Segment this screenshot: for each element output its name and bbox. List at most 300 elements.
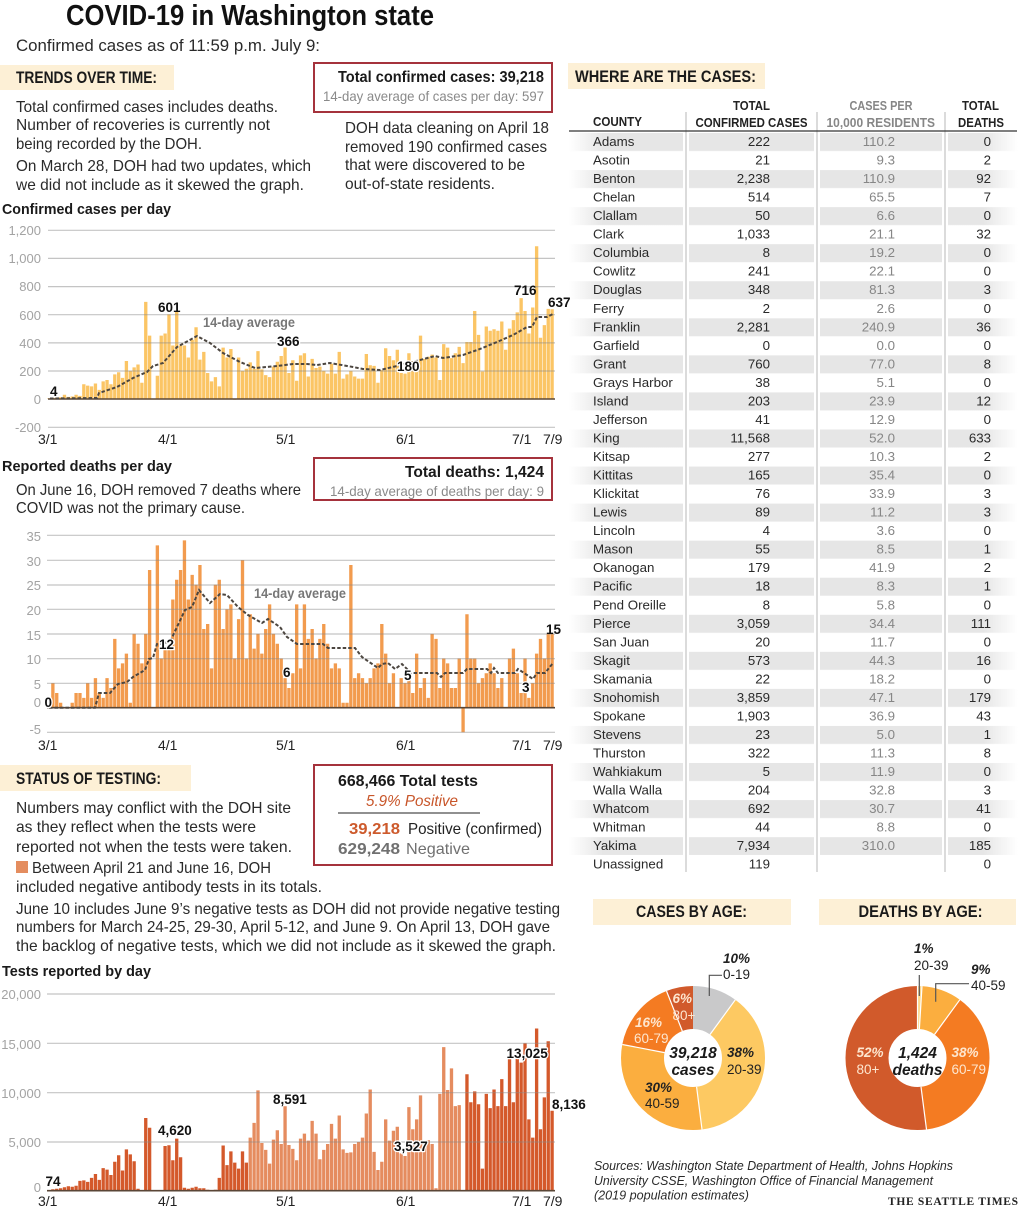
table header: DEATHS bbox=[958, 115, 1004, 130]
column: county names: Pend Oreille bbox=[593, 597, 666, 612]
column: county names: Kittitas bbox=[593, 468, 633, 482]
heading: deaths by age bbox=[819, 899, 1016, 925]
grid lines and axis labels: 800 bbox=[19, 279, 41, 294]
column: county names: Spokane bbox=[593, 708, 646, 723]
column: cases per 10,000 residents: 47.1 bbox=[869, 690, 895, 705]
value labels: 637 bbox=[548, 295, 571, 310]
column: cases per 10,000 residents: 12.9 bbox=[869, 412, 895, 427]
column: total confirmed cases: 20 bbox=[755, 634, 770, 649]
column: total deaths: 0 bbox=[984, 375, 991, 390]
column: cases per 10,000 residents: 11.2 bbox=[870, 505, 895, 520]
column: total deaths: 111 bbox=[971, 616, 991, 631]
column: county names: Stevens bbox=[593, 727, 641, 742]
column: total confirmed cases: 8 bbox=[763, 245, 770, 260]
column: cases per 10,000 residents: 35.4 bbox=[869, 468, 895, 482]
value labels: 14-day average bbox=[254, 586, 346, 601]
heading: cases by age bbox=[593, 899, 791, 925]
legend: antibody test swatch: included negative antibody tests in its totals. bbox=[16, 879, 322, 896]
column: county names: Skamania bbox=[593, 671, 653, 686]
grid lines and axis labels: 20 bbox=[27, 603, 41, 618]
column: county names: Lincoln bbox=[593, 523, 635, 538]
column: total confirmed cases: 2,238 bbox=[737, 171, 770, 186]
value labels: 180 bbox=[397, 359, 420, 374]
text block: DOH data cleaning note: out-of-state residents. bbox=[345, 176, 495, 193]
slice labels: 60-79 bbox=[952, 1062, 986, 1077]
panel: where are the cases bbox=[568, 63, 1020, 872]
slice labels: 52% bbox=[856, 1045, 884, 1060]
column: county names: Garfield bbox=[593, 338, 640, 353]
column: county names: Cowlitz bbox=[593, 264, 636, 279]
column: total confirmed cases: 514 bbox=[748, 190, 770, 205]
column: total confirmed cases: 277 bbox=[748, 449, 770, 464]
column: county names: Asotin bbox=[593, 152, 630, 168]
column: total deaths: 1 bbox=[984, 727, 991, 742]
grid lines and axis labels: 1,000 bbox=[8, 251, 41, 266]
column: total confirmed cases: 222 bbox=[748, 134, 770, 149]
column: total confirmed cases: 1,903 bbox=[737, 708, 770, 723]
value labels: 4,620 bbox=[158, 1123, 192, 1138]
text block: June 10 note: numbers for March 24-25, 29-30, April 5-12, and June 9. On April 13, DOH gave bbox=[16, 919, 550, 936]
table header: CASES PER bbox=[850, 98, 913, 113]
text block: DOH data cleaning note: removed 190 confirmed cases bbox=[345, 139, 547, 156]
column: cases per 10,000 residents: 8.5 bbox=[876, 542, 895, 557]
text block: trends notes: Number of recoveries is currently not bbox=[16, 117, 271, 134]
grid lines and axis labels: 5/1 bbox=[276, 1193, 296, 1209]
column: total confirmed cases: 41 bbox=[755, 412, 770, 427]
grid lines and axis labels: 7/1 bbox=[512, 431, 532, 447]
column: cases per 10,000 residents: 8.3 bbox=[876, 579, 895, 594]
grid lines and axis labels: 25 bbox=[27, 578, 41, 593]
column: total deaths: 0 bbox=[984, 134, 991, 149]
column: cases per 10,000 residents: 11.3 bbox=[870, 746, 895, 760]
grid lines and axis labels: 5/1 bbox=[276, 737, 296, 753]
column: county names: Clallam bbox=[593, 208, 637, 223]
panel: cases by age bbox=[593, 899, 791, 1129]
text block: testing notes bbox=[16, 800, 292, 856]
grid lines and axis labels: 4/1 bbox=[158, 737, 178, 753]
slice labels: 0-19 bbox=[723, 967, 750, 982]
value labels: 5 bbox=[404, 668, 412, 683]
grid lines and axis labels: 15 bbox=[27, 628, 41, 643]
column: total confirmed cases: 11,568 bbox=[730, 430, 770, 446]
text block: trends notes: we did not include as it skewed the graph. bbox=[15, 177, 304, 194]
column: cases per 10,000 residents: 18.2 bbox=[869, 671, 895, 686]
callout: total confirmed cases: Total confirmed cases: 39,218 bbox=[338, 69, 544, 86]
column: county names: Island bbox=[593, 393, 628, 408]
callout: test totals: 5.9% Positive bbox=[366, 793, 458, 810]
legend: antibody test swatch bbox=[16, 860, 322, 896]
column: cases per 10,000 residents: 23.9 bbox=[869, 393, 895, 408]
column: total confirmed cases: 2 bbox=[763, 301, 770, 316]
grid lines and axis labels: 30 bbox=[27, 554, 41, 569]
grid lines and axis labels: 7/9 bbox=[543, 431, 563, 447]
text block: trends notes: Total confirmed cases includes deaths. bbox=[16, 99, 278, 116]
text block: DOH data cleaning note: DOH data cleaning on April 18 bbox=[345, 120, 549, 137]
column: total confirmed cases: 760 bbox=[748, 356, 770, 371]
column: cases per 10,000 residents: 9.3 bbox=[876, 152, 895, 168]
column: county names: Lewis bbox=[593, 505, 627, 520]
grid lines and axis labels: 1,200 bbox=[8, 223, 41, 238]
callout: total deaths: 14-day average of deaths per day: 9 bbox=[330, 483, 544, 499]
column: total deaths: 41 bbox=[976, 801, 991, 816]
text block: trends notes: On March 28, DOH had two updates, which bbox=[16, 158, 311, 175]
column: cases per 10,000 residents: 41.9 bbox=[869, 560, 895, 575]
column: cases per 10,000 residents: 5.0 bbox=[876, 727, 895, 742]
center total: deaths bbox=[893, 1062, 943, 1079]
title: COVID-19 in Washington state bbox=[66, 0, 434, 32]
column: total confirmed cases: 5 bbox=[763, 764, 770, 779]
column: total confirmed cases bbox=[730, 134, 770, 872]
column: county names: Mason bbox=[593, 542, 633, 557]
column: county names: Adams bbox=[593, 134, 635, 149]
grid lines and axis labels: 20,000 bbox=[1, 987, 41, 1002]
column: total confirmed cases: 21 bbox=[755, 152, 770, 168]
center total bbox=[893, 1045, 943, 1079]
grid lines and axis labels: 4/1 bbox=[158, 431, 178, 447]
slice labels: 38% bbox=[727, 1045, 754, 1060]
column: total deaths: 0 bbox=[984, 468, 991, 482]
grid lines and axis labels bbox=[8, 223, 563, 447]
table header bbox=[593, 98, 1004, 130]
bars: tests, positive and negative bbox=[49, 1029, 552, 1191]
column: total deaths: 3 bbox=[984, 783, 991, 798]
column: county names: Whatcom bbox=[593, 801, 649, 816]
slice labels: 20-39 bbox=[914, 958, 949, 973]
column: total deaths: 3 bbox=[984, 282, 991, 297]
value labels bbox=[50, 283, 571, 399]
column: cases per 10,000 residents: 5.1 bbox=[876, 375, 895, 390]
value labels: 8,591 bbox=[273, 1092, 307, 1107]
column: total deaths: 12 bbox=[976, 393, 991, 408]
grid lines and axis labels: 7/1 bbox=[512, 1193, 532, 1209]
text block: trends notes bbox=[15, 99, 311, 194]
slice labels: 80+ bbox=[672, 1008, 696, 1023]
slice labels bbox=[856, 941, 1006, 1077]
credit: The Seattle Times: THE SEATTLE TIMES bbox=[888, 1196, 1018, 1208]
column: cases per 10,000 residents: 3.6 bbox=[876, 523, 895, 538]
value labels: 8,136 bbox=[552, 1097, 586, 1112]
column: total confirmed cases: 18 bbox=[755, 579, 770, 594]
column: county names bbox=[593, 134, 673, 872]
column: cases per 10,000 residents bbox=[862, 134, 895, 853]
center total bbox=[669, 1045, 717, 1079]
column: total confirmed cases: 203 bbox=[748, 393, 770, 408]
column: total deaths: 0 bbox=[984, 857, 991, 872]
slice labels bbox=[634, 951, 762, 1111]
table header: TOTAL bbox=[962, 98, 999, 113]
column: total deaths: 3 bbox=[984, 505, 991, 520]
column: cases per 10,000 residents: 32.8 bbox=[869, 783, 895, 798]
column: cases per 10,000 residents: 36.9 bbox=[869, 708, 895, 723]
column: cases per 10,000 residents: 30.7 bbox=[869, 801, 895, 816]
value labels bbox=[46, 1046, 586, 1189]
text block: sources bbox=[594, 1158, 953, 1202]
grid lines and axis labels: 6/1 bbox=[396, 431, 416, 447]
value labels: 15 bbox=[546, 622, 562, 637]
slice labels: 10% bbox=[723, 951, 750, 966]
column: cases per 10,000 residents: 8.8 bbox=[876, 820, 895, 835]
column: total confirmed cases: 204 bbox=[748, 783, 770, 798]
callout: test totals: Positive (confirmed) bbox=[408, 821, 542, 838]
column: county names: Pierce bbox=[593, 616, 631, 631]
heading: status of testing: STATUS OF TESTING: bbox=[16, 769, 161, 788]
column: cases per 10,000 residents: 2.6 bbox=[876, 301, 895, 316]
column: county names: Okanogan bbox=[593, 560, 654, 575]
callout: total deaths: Total deaths: 1,424 bbox=[405, 464, 544, 481]
subtitle: Confirmed cases as of 11:59 p.m. July 9: bbox=[16, 36, 320, 55]
grid lines and axis labels: 5 bbox=[34, 677, 41, 692]
slice labels: 60-79 bbox=[634, 1031, 669, 1046]
callout: test totals: 629,248 bbox=[338, 841, 400, 858]
column: total confirmed cases: 3,059 bbox=[737, 616, 770, 631]
column: cases per 10,000 residents: 34.4 bbox=[869, 616, 895, 631]
callout: test totals: Negative bbox=[406, 841, 470, 858]
column: cases per 10,000 residents: 81.3 bbox=[869, 282, 895, 297]
column: cases per 10,000 residents: 110.9 bbox=[863, 171, 895, 186]
grid lines and axis labels: 4/1 bbox=[158, 1193, 178, 1209]
table header: COUNTY bbox=[593, 114, 642, 129]
column: total deaths: 0 bbox=[984, 412, 991, 427]
column: cases per 10,000 residents: 110.2 bbox=[863, 134, 895, 149]
column: total deaths bbox=[969, 134, 991, 872]
column: cases per 10,000 residents: 52.0 bbox=[869, 430, 895, 446]
value labels: 366 bbox=[277, 334, 300, 349]
grid lines and axis labels: 7/9 bbox=[543, 1193, 563, 1209]
column: total deaths: 8 bbox=[984, 746, 991, 760]
column: county names: Chelan bbox=[593, 190, 635, 205]
column: county names: Grant bbox=[593, 356, 627, 371]
column: county names: Snohomish bbox=[593, 690, 660, 705]
grid lines and axis labels: -200 bbox=[15, 420, 41, 435]
column: total confirmed cases: 4 bbox=[763, 523, 770, 538]
column: cases per 10,000 residents: 21.1 bbox=[869, 227, 895, 242]
column: total deaths: 0 bbox=[984, 820, 991, 835]
grid lines and axis labels: 400 bbox=[19, 336, 41, 351]
callout: test totals: 39,218 bbox=[349, 821, 400, 838]
column: cases per 10,000 residents: 310.0 bbox=[862, 838, 895, 853]
column: cases per 10,000 residents: 11.7 bbox=[870, 634, 895, 649]
column: county names: Jefferson bbox=[593, 412, 647, 427]
value labels: 6 bbox=[283, 665, 291, 680]
grid lines and axis labels bbox=[1, 987, 563, 1209]
legend: antibody test swatch: Between April 21 and June 16, DOH bbox=[32, 860, 271, 877]
column: county names: Klickitat bbox=[593, 486, 639, 501]
column: cases per 10,000 residents: 44.3 bbox=[869, 653, 895, 668]
column: total deaths: 2 bbox=[984, 152, 991, 168]
column: total confirmed cases: 38 bbox=[755, 375, 770, 390]
column: total deaths: 8 bbox=[984, 356, 991, 371]
column: total confirmed cases: 573 bbox=[748, 653, 770, 668]
center total: cases bbox=[671, 1062, 715, 1079]
callout: total confirmed cases bbox=[314, 63, 552, 112]
column: total confirmed cases: 322 bbox=[748, 746, 770, 760]
column: total deaths: 0 bbox=[984, 764, 991, 779]
donut chart: cases by age bbox=[622, 951, 762, 1129]
donut chart: deaths by age bbox=[856, 941, 1006, 1129]
column: total confirmed cases: 1,033 bbox=[737, 227, 770, 242]
text block: sources: Sources: Washington State Department of Health, Johns Hopkins bbox=[594, 1158, 953, 1173]
column: county names: Unassigned bbox=[593, 857, 663, 872]
grid lines and axis labels: 35 bbox=[27, 529, 41, 544]
column: cases per 10,000 residents: 240.9 bbox=[862, 319, 895, 334]
column: county names: Skagit bbox=[593, 653, 630, 668]
value labels: 74 bbox=[46, 1174, 61, 1189]
column: total deaths: 0 bbox=[984, 671, 991, 686]
column: total confirmed cases: 50 bbox=[755, 208, 770, 223]
column: county names: Yakima bbox=[593, 838, 637, 853]
grid lines and axis labels: 6/1 bbox=[396, 737, 416, 753]
column: county names: Whitman bbox=[593, 820, 645, 835]
table header: TOTAL bbox=[733, 98, 770, 113]
column: total deaths: 3 bbox=[984, 486, 991, 501]
column: county names: Pacific bbox=[593, 579, 633, 594]
column: total deaths: 0 bbox=[984, 264, 991, 279]
bar chart: confirmed cases per day bbox=[8, 223, 571, 447]
slice labels: 16% bbox=[635, 1015, 662, 1030]
column: total deaths: 0 bbox=[984, 597, 991, 612]
column: total deaths: 43 bbox=[976, 708, 991, 723]
heading: status of testing bbox=[0, 765, 191, 791]
column: total deaths: 0 bbox=[984, 301, 991, 316]
column: county names: Columbia bbox=[593, 245, 650, 260]
column: cases per 10,000 residents: 5.8 bbox=[876, 597, 895, 612]
value labels: 4 bbox=[50, 384, 58, 399]
grid lines and axis labels: 10 bbox=[27, 652, 41, 667]
column: county names: Franklin bbox=[593, 319, 640, 334]
grid lines and axis labels: 5/1 bbox=[276, 431, 296, 447]
column: total confirmed cases: 692 bbox=[748, 801, 770, 816]
column: cases per 10,000 residents: 65.5 bbox=[869, 190, 895, 205]
value labels: 12 bbox=[159, 637, 174, 652]
text block: June 10 note: June 10 includes June 9’s negative tests as DOH did not provide negative testing bbox=[16, 901, 560, 918]
center total: 39,218 bbox=[669, 1045, 717, 1062]
slice labels: 40-59 bbox=[971, 978, 1006, 993]
column: county names: Grays Harbor bbox=[593, 375, 673, 390]
text block: DOH data cleaning note: that were discovered to be bbox=[345, 157, 525, 174]
leader lines: 20-39 and 40-59 bbox=[919, 975, 969, 1002]
center total: 1,424 bbox=[898, 1045, 937, 1062]
column: cases per 10,000 residents: 0.0 bbox=[876, 338, 895, 353]
column: total confirmed cases: 348 bbox=[748, 282, 770, 297]
slice labels: 38% bbox=[952, 1045, 979, 1060]
grid lines and axis labels: 7/1 bbox=[512, 737, 532, 753]
heading: cases by age: CASES BY AGE: bbox=[636, 902, 747, 921]
column: total confirmed cases: 165 bbox=[748, 468, 770, 482]
column: total deaths: 0 bbox=[984, 208, 991, 223]
column: total deaths: 0 bbox=[984, 338, 991, 353]
column: total confirmed cases: 2,281 bbox=[737, 319, 770, 334]
callout: test totals: 668,466 Total tests bbox=[338, 773, 478, 790]
value labels: 0 bbox=[44, 695, 52, 710]
column: county names: Kitsap bbox=[593, 449, 630, 464]
grid lines and axis labels: 600 bbox=[19, 308, 41, 323]
heading: where are the cases: WHERE ARE THE CASES: bbox=[575, 67, 756, 86]
column: cases per 10,000 residents: 6.6 bbox=[876, 208, 895, 223]
grid lines and axis labels bbox=[27, 529, 563, 753]
column: total deaths: 92 bbox=[976, 171, 991, 186]
column: total deaths: 7 bbox=[984, 190, 991, 205]
column: total confirmed cases: 241 bbox=[748, 264, 770, 279]
value labels: 13,025 bbox=[506, 1046, 548, 1061]
grid lines and axis labels: -5 bbox=[29, 722, 41, 737]
column: cases per 10,000 residents: 19.2 bbox=[869, 245, 895, 260]
column: cases per 10,000 residents: 77.0 bbox=[869, 356, 895, 371]
callout: test totals bbox=[314, 765, 552, 865]
column: total confirmed cases: 119 bbox=[749, 857, 770, 872]
text block: testing notes: reported not when the tests were taken. bbox=[16, 839, 292, 856]
slice labels: 6% bbox=[672, 991, 692, 1006]
column: total confirmed cases: 23 bbox=[755, 727, 770, 742]
grid lines and axis labels: 3/1 bbox=[38, 431, 58, 447]
column: cases per 10,000 residents: 11.9 bbox=[870, 764, 895, 779]
table header: CONFIRMED CASES bbox=[696, 115, 808, 130]
column: county names: Douglas bbox=[593, 282, 642, 297]
line: 14-day average of cases bbox=[50, 314, 553, 398]
column: total confirmed cases: 89 bbox=[755, 505, 770, 520]
column: cases per 10,000 residents: 10.3 bbox=[869, 449, 895, 464]
grid lines and axis labels: 5,000 bbox=[8, 1135, 41, 1150]
slice labels: 9% bbox=[971, 962, 991, 977]
heading: deaths by age: DEATHS BY AGE: bbox=[858, 902, 982, 921]
panel: trends over time bbox=[0, 63, 571, 753]
column: total deaths: 1 bbox=[984, 542, 991, 557]
text block: June 16 note: On June 16, DOH removed 7 deaths where bbox=[16, 482, 301, 499]
grid lines and axis labels: 0 bbox=[34, 392, 41, 407]
text block: trends notes: being recorded by the DOH. bbox=[16, 136, 202, 153]
heading: confirmed cases per day: Confirmed cases per day bbox=[2, 201, 172, 218]
bars: daily deaths bbox=[53, 540, 552, 732]
column: total confirmed cases: 3,859 bbox=[737, 690, 770, 705]
column: total deaths: 16 bbox=[976, 653, 991, 668]
text block: June 16 note: COVID was not the primary cause. bbox=[16, 500, 245, 517]
text block: sources: (2019 population estimates) bbox=[594, 1188, 749, 1202]
column: total confirmed cases: 22 bbox=[755, 671, 770, 686]
grid lines and axis labels: 3/1 bbox=[38, 737, 58, 753]
slice labels: 80+ bbox=[856, 1062, 880, 1077]
text block: DOH data cleaning note bbox=[345, 120, 549, 193]
grid lines and axis labels: 10,000 bbox=[1, 1086, 41, 1101]
panel: status of testing bbox=[0, 765, 586, 1209]
text block: June 10 note bbox=[16, 901, 560, 955]
column: total deaths: 633 bbox=[969, 430, 991, 446]
column: county names: San Juan bbox=[593, 634, 649, 649]
value labels: 716 bbox=[514, 283, 537, 298]
column: county names: King bbox=[593, 430, 620, 446]
table header: 10,000 RESIDENTS bbox=[826, 115, 935, 130]
value labels bbox=[44, 586, 562, 710]
grid lines and axis labels: 6/1 bbox=[396, 1193, 416, 1209]
column: total deaths: 0 bbox=[984, 245, 991, 260]
column: total deaths: 179 bbox=[969, 690, 991, 705]
line: 14-day average of deaths bbox=[49, 590, 553, 708]
value labels: 601 bbox=[158, 300, 181, 315]
column: total confirmed cases: 55 bbox=[755, 542, 770, 557]
slice labels: 1% bbox=[914, 941, 934, 956]
column: county names: Benton bbox=[593, 171, 635, 186]
grid lines and axis labels: 0 bbox=[34, 1180, 41, 1195]
grid lines and axis labels: 200 bbox=[19, 364, 41, 379]
heading: reported deaths per day: Reported deaths per day bbox=[2, 458, 173, 475]
column: county names: Clark bbox=[593, 227, 624, 242]
heading: trends over time: TRENDS OVER TIME: bbox=[16, 68, 157, 87]
value labels: 3 bbox=[522, 680, 530, 695]
slice labels: 40-59 bbox=[645, 1096, 680, 1111]
value labels: 14-day average bbox=[203, 315, 295, 330]
column: total deaths: 1 bbox=[984, 579, 991, 594]
grid lines and axis labels: 15,000 bbox=[1, 1037, 41, 1052]
grid lines and axis labels: 0 bbox=[34, 695, 41, 710]
heading: trends over time bbox=[0, 65, 174, 90]
